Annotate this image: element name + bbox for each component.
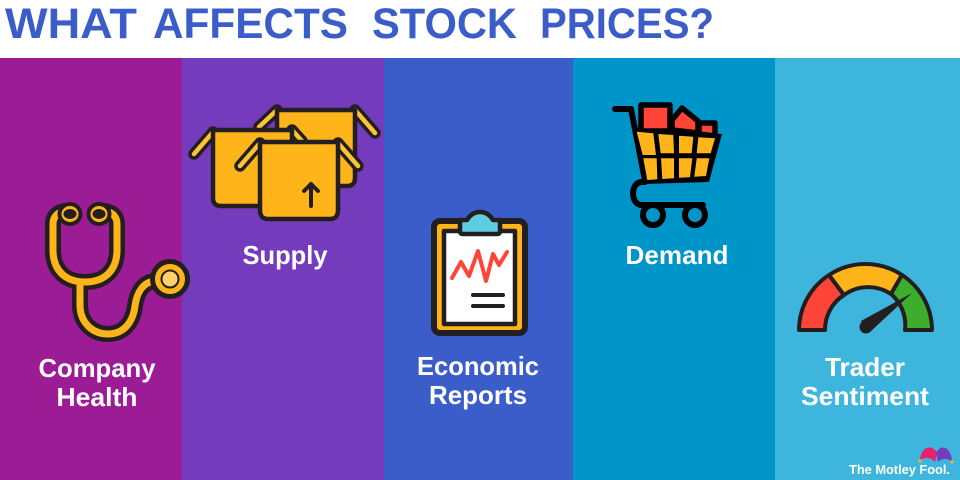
label: supply: Supply <box>242 240 328 270</box>
front box <box>240 142 358 219</box>
label: trader sentiment: Trader <box>825 352 905 382</box>
title: WHAT <box>5 0 137 48</box>
label: company health <box>38 353 156 412</box>
title: PRICES? <box>540 0 714 48</box>
left box <box>194 130 302 206</box>
icon: shopping cart <box>615 105 722 225</box>
label: trader sentiment: Sentiment <box>801 381 929 411</box>
label: trader sentiment <box>801 352 929 411</box>
title: STOCK <box>372 0 517 48</box>
logo: the motley fool: The Motley Fool. <box>849 462 950 477</box>
panel: trader sentiment background <box>775 58 960 480</box>
label: economic reports <box>417 351 539 410</box>
basket <box>634 128 722 184</box>
icon: jester hat <box>918 447 954 464</box>
panel: economic reports background <box>384 58 573 480</box>
icon: sentiment gauge <box>799 264 932 334</box>
label: company health: Health <box>56 382 138 412</box>
panel: company health background <box>0 58 182 480</box>
title <box>5 0 714 48</box>
cart frame <box>615 109 705 225</box>
cart contents <box>641 105 715 136</box>
panel: demand background <box>573 58 775 480</box>
basket cells <box>637 132 715 180</box>
title: AFFECTS <box>153 0 348 48</box>
label: demand: Demand <box>626 240 728 270</box>
icon: clipboard with chart <box>434 212 525 333</box>
label: economic reports: Economic <box>417 351 539 381</box>
icon: open boxes <box>194 110 375 219</box>
label: company health: Company <box>38 353 156 383</box>
gauge needle <box>860 293 912 334</box>
icon: stethoscope <box>53 204 188 334</box>
panel: supply background <box>182 58 384 480</box>
label: economic reports: Reports <box>429 380 527 410</box>
logo: the motley fool <box>849 447 954 477</box>
back box <box>259 110 375 186</box>
